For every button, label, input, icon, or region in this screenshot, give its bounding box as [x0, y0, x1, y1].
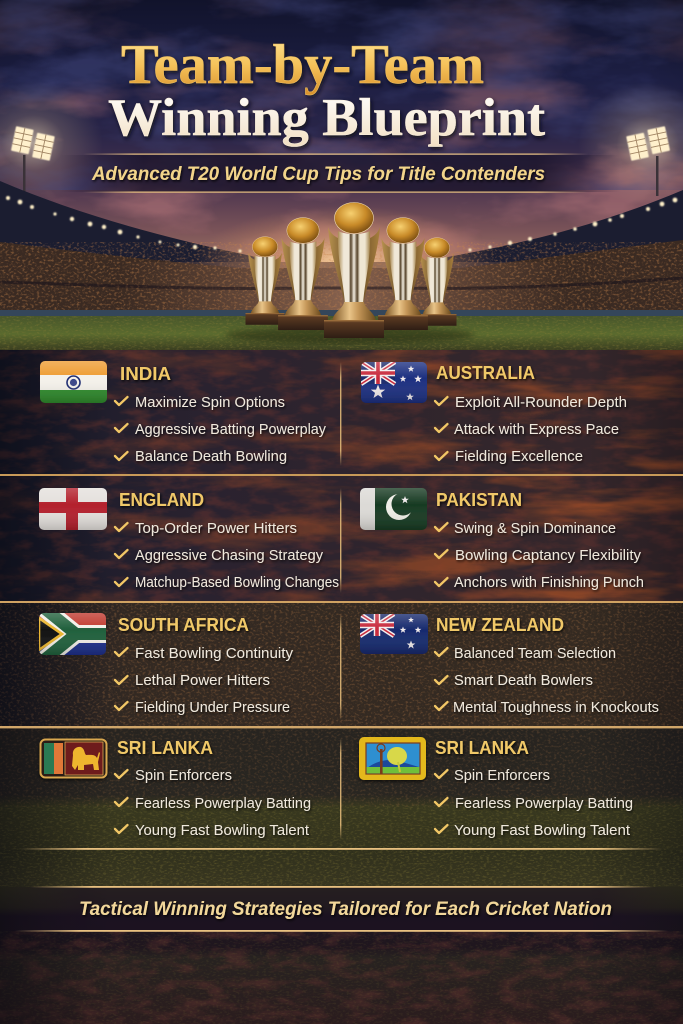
panel: New Zealand: Balanced Team Selection: [454, 646, 616, 662]
panel: Sri Lanka: Spin Enforcers: [135, 768, 232, 784]
panel: West Indies flag, Sri Lanka label: Fearless Powerplay Batting: [455, 796, 633, 812]
flag: West Indies crest: [359, 737, 426, 780]
stadium stands: [0, 181, 683, 320]
pitch grass: [0, 316, 683, 352]
footer ground: [0, 850, 683, 1024]
night sky: [0, 0, 683, 268]
footer banner: [0, 886, 683, 932]
panel: West Indies flag, Sri Lanka label: Young Fast Bowling Talent: [454, 823, 630, 839]
title: [108, 34, 545, 147]
trophies: [225, 202, 475, 343]
flag: Pakistan: [360, 488, 427, 530]
panel: West Indies flag, Sri Lanka label: SRI LANKA: [435, 738, 529, 758]
panel: India: Aggressive Batting Powerplay: [135, 422, 327, 438]
trophy centre: [324, 202, 384, 338]
panel: New Zealand: Mental Toughness in Knockouts: [453, 700, 659, 716]
panel: England: Matchup-Based Bowling Changes: [135, 575, 339, 591]
panel background crowd: [0, 602, 683, 850]
floodlight left: [0, 81, 103, 205]
flag: England: [39, 488, 107, 530]
flag: South Africa: [39, 613, 106, 655]
panel background upper: [0, 350, 683, 602]
subtitle banner: [60, 154, 620, 193]
panel: West Indies flag, Sri Lanka label: Spin Enforcers: [454, 768, 550, 784]
panel: England: Top-Order Power Hitters: [135, 521, 297, 537]
flag: India: [40, 361, 107, 403]
footer banner: Tactical Winning Strategies Tailored for Each Cricket Nation: [79, 898, 612, 920]
panel: India: INDIA: [120, 364, 171, 384]
title: Team-by-Team: [121, 34, 484, 96]
trophy inner left: [278, 218, 328, 330]
row dividers: [0, 362, 683, 850]
trophy inner right: [378, 218, 428, 330]
panel: Pakistan: PAKISTAN: [436, 490, 522, 510]
subtitle banner: Advanced T20 World Cup Tips for Title Contenders: [91, 163, 545, 185]
panel: Sri Lanka: Fearless Powerplay Batting: [135, 796, 311, 812]
panel: Australia: Exploit All-Rounder Depth: [455, 395, 627, 411]
panel: India: Maximize Spin Options: [135, 395, 285, 411]
flag: Australia: [361, 362, 427, 403]
panel: England: ENGLAND: [119, 490, 204, 510]
panel: South Africa: Fielding Under Pressure: [135, 700, 290, 716]
trophy outer right: [418, 238, 456, 326]
panel: Australia: [361, 362, 627, 465]
panel: Sri Lanka: SRI LANKA: [117, 738, 213, 758]
panel: Pakistan: Swing & Spin Dominance: [454, 521, 616, 537]
trophy outer left: [246, 237, 284, 325]
panel: New Zealand: Smart Death Bowlers: [454, 673, 593, 689]
panel: Pakistan: [360, 488, 644, 591]
panel: Sri Lanka: [40, 738, 311, 839]
panel: India: [40, 361, 327, 465]
panel: Sri Lanka: Young Fast Bowling Talent: [135, 823, 309, 839]
panel: New Zealand: [360, 614, 659, 716]
title: Winning Blueprint: [108, 89, 545, 147]
panel: India: Balance Death Bowling: [135, 449, 287, 465]
panel: England: [39, 488, 339, 591]
panel: Australia: Attack with Express Pace: [454, 422, 619, 438]
panel: England: Aggressive Chasing Strategy: [135, 548, 324, 564]
floodlight right: [578, 82, 683, 206]
panel: Pakistan: Anchors with Finishing Punch: [454, 575, 644, 591]
flag: New Zealand: [360, 614, 428, 654]
panel: Australia: Fielding Excellence: [455, 449, 583, 465]
panel: South Africa: Fast Bowling Continuity: [135, 646, 294, 662]
panel: South Africa: SOUTH AFRICA: [118, 615, 249, 635]
panel: Australia: AUSTRALIA: [436, 363, 535, 383]
flag: Sri Lanka: [40, 740, 106, 778]
panel: New Zealand: NEW ZEALAND: [436, 615, 564, 635]
panel: South Africa: [39, 604, 294, 716]
panel: West Indies flag, Sri Lanka label: [359, 737, 633, 839]
panel: South Africa: Lethal Power Hitters: [135, 673, 270, 689]
panel: Pakistan: Bowling Captancy Flexibility: [455, 548, 642, 564]
